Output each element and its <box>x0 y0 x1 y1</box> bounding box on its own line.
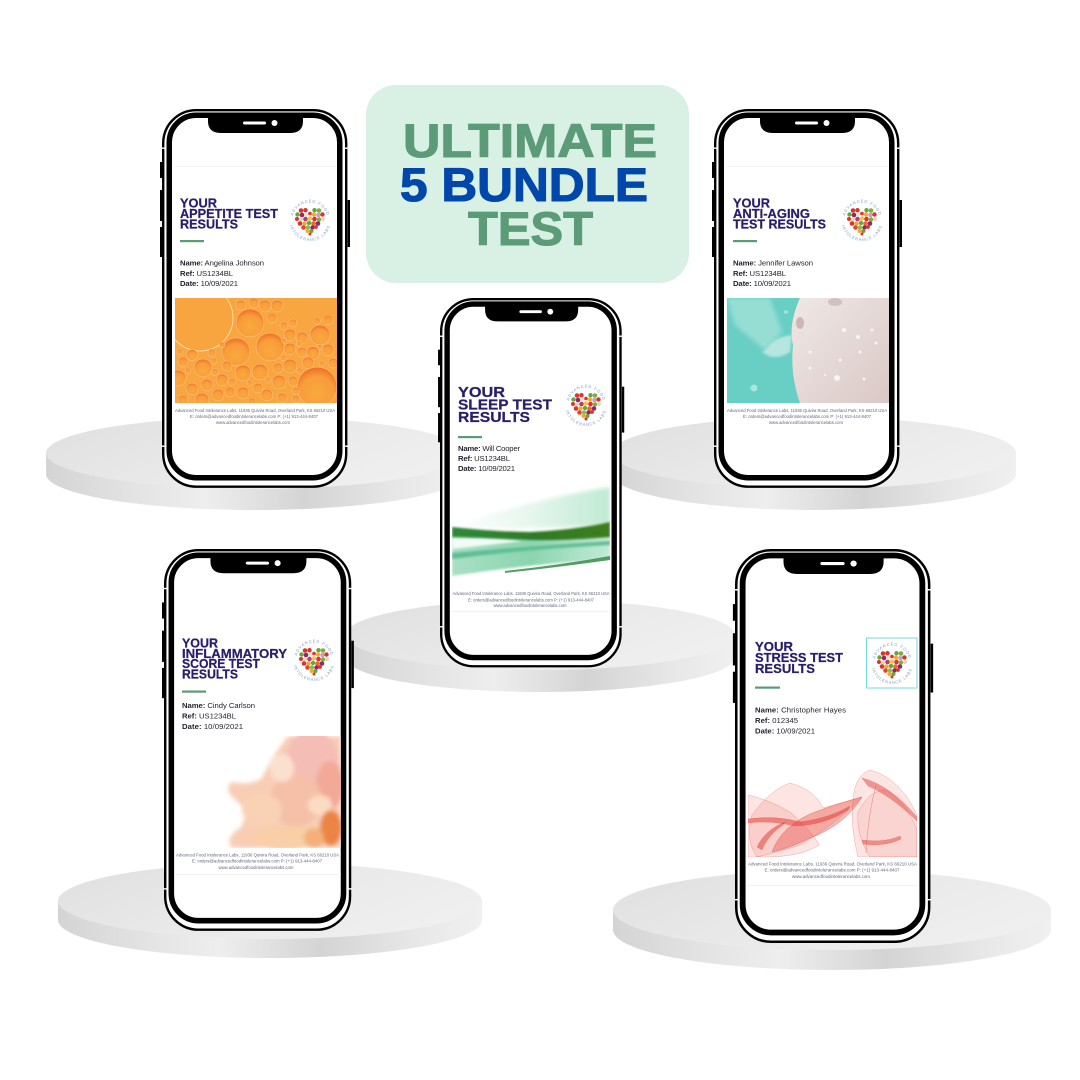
logo: ADVANCED FOOD <box>842 200 881 216</box>
patient details: Name: Christopher Hayes <box>755 706 846 714</box>
lab footer: E: orders@advancedfoodintolerancelabs.com P: (+1) 913-444-8407 <box>190 414 318 419</box>
patient details: Name: Cindy Carlson <box>182 701 255 710</box>
lab footer: www.advancedfoodintolerancelabs.com <box>494 603 567 608</box>
lab footer <box>748 862 918 879</box>
platform: appetite <box>46 417 464 510</box>
lab footer: Advanced Food Intolerance Labs, 11936 Quivira Road, Overland Park, KS 66210 USA <box>176 852 340 858</box>
phone frame <box>438 299 624 666</box>
patient details <box>182 701 255 731</box>
lab footer: www.advancedfoodintolerancelabs.com <box>216 420 290 425</box>
logo in cyan selection box <box>866 638 918 688</box>
title line: test: TEST <box>468 202 593 255</box>
lab footer: www.advancedfoodintolerancelabs.com <box>218 865 294 870</box>
logo: INTOLERANCE LABS <box>842 225 882 242</box>
patient details: Date: 10/09/2021 <box>458 464 515 473</box>
patient details: Ref: US1234BL <box>458 454 511 463</box>
lab footer <box>727 408 888 425</box>
lab footer: www.advancedfoodintolerancelabs.com <box>792 874 870 879</box>
title panel <box>366 85 689 283</box>
logo: ADVANCED FOOD <box>566 384 605 401</box>
lab footer: Advanced Food Intolerance Labs, 11936 Quivira Road, Overland Park, KS 66210 USA <box>452 591 610 596</box>
patient details: Ref: 012345 <box>755 716 798 725</box>
phone: sleep test <box>438 298 624 668</box>
logo <box>566 384 606 426</box>
heading: YOUR <box>755 639 794 654</box>
patient details: Ref: US1234BL <box>733 269 787 278</box>
heading: YOUR <box>182 636 219 650</box>
lab footer: Advanced Food Intolerance Labs, 11936 Quivira Road, Overland Park, KS 66210 USA <box>748 862 918 866</box>
patient details: Ref: US1234BL <box>180 269 234 278</box>
image: red translucent ribbons <box>748 770 917 857</box>
heading: STRESS TEST <box>755 650 843 665</box>
patient details: Date: 10/09/2021 <box>180 279 238 288</box>
heading <box>755 639 843 676</box>
heading <box>733 196 826 232</box>
heading: RESULTS <box>458 410 530 426</box>
patient details <box>755 706 846 736</box>
lab footer: E: orders@advancedfoodintolerancelabs.com P: (+1) 913-444-8407 <box>743 414 871 419</box>
phone frame <box>712 110 902 487</box>
logo: ADVANCED FOOD <box>290 200 329 216</box>
patient details <box>458 444 520 473</box>
phone: appetite test <box>160 109 350 488</box>
phone frame <box>160 110 350 487</box>
heading: YOUR <box>458 385 506 401</box>
logo: INTOLERANCE LABS <box>290 225 330 242</box>
lab footer: www.advancedfoodintolerancelabs.com <box>769 420 843 425</box>
heading: SCORE TEST <box>182 656 260 671</box>
patient details: Date: 10/09/2021 <box>755 726 815 736</box>
logo <box>842 200 882 242</box>
logo <box>290 200 330 242</box>
lab footer <box>176 852 340 870</box>
patient details <box>733 258 813 288</box>
phone: stress test <box>732 549 934 943</box>
phone: inflammatory score test <box>162 549 354 931</box>
patient details: Name: Jennifer Lawson <box>733 258 813 268</box>
lab footer: Advanced Food Intolerance Labs, 11936 Quivira Road, Overland Park, KS 66210 USA <box>175 408 336 413</box>
heading: RESULTS <box>755 661 815 676</box>
patient details: Name: Will Cooper <box>458 444 520 453</box>
patient details: Ref: US1234BL <box>182 712 237 720</box>
platform: inflammatory <box>58 863 482 958</box>
logo: INTOLERANCE LABS <box>294 665 334 682</box>
phone frame <box>162 550 354 930</box>
phone frame <box>733 550 933 942</box>
phone: anti-aging test <box>712 109 902 488</box>
heading: RESULTS <box>180 216 238 232</box>
patient details: Date: 10/09/2021 <box>733 279 791 288</box>
title line: 5 bundle: 5 BUNDLE <box>400 158 648 211</box>
lab footer: E: orders@advancedfoodintolerancelabs.com P: (+1) 913-444-8407 <box>468 598 594 602</box>
heading <box>182 636 287 682</box>
image: peach ink cloud <box>228 730 344 850</box>
patient details <box>180 258 264 288</box>
platform: anti-aging <box>612 417 1016 510</box>
image: teal gel and droplets <box>727 298 889 403</box>
heading: YOUR <box>733 196 771 210</box>
logo in cyan selection box: ADVANCED FOOD <box>872 642 911 659</box>
heading: SLEEP TEST <box>458 398 552 414</box>
patient details: Date: 10/09/2021 <box>182 722 243 731</box>
lab footer: Advanced Food Intolerance Labs, 11936 Quivira Road, Overland Park, KS 66210 USA <box>727 408 888 413</box>
logo: INTOLERANCE LABS <box>566 410 606 426</box>
heading: YOUR <box>180 196 218 210</box>
platform: stress <box>613 870 1051 970</box>
heading: INFLAMMATORY <box>182 646 287 661</box>
image: orange bubbles <box>175 298 337 403</box>
title line: ultimate: ULTIMATE <box>403 114 657 167</box>
image: green waves <box>452 487 610 576</box>
lab footer <box>452 591 610 608</box>
lab footer <box>175 408 336 425</box>
heading <box>180 196 278 232</box>
heading: ANTI-AGING <box>733 206 810 221</box>
heading: TEST RESULTS <box>733 216 826 232</box>
lab footer: E: orders@advancedfoodintolerancelabs.com P: (+1) 913-444-8407 <box>764 868 900 872</box>
patient details: Name: Angelina Johnson <box>180 258 264 268</box>
heading <box>458 385 552 426</box>
lab footer: E: orders@advancedfoodintolerancelabs.com P: (+1) 913-444-8407 <box>192 858 322 864</box>
platform: sleep <box>345 600 735 692</box>
logo <box>294 640 334 682</box>
logo: ADVANCED FOOD <box>294 640 333 656</box>
heading: RESULTS <box>182 666 238 682</box>
heading: APPETITE TEST <box>180 206 278 221</box>
logo in cyan selection box: INTOLERANCE LABS <box>872 668 912 684</box>
